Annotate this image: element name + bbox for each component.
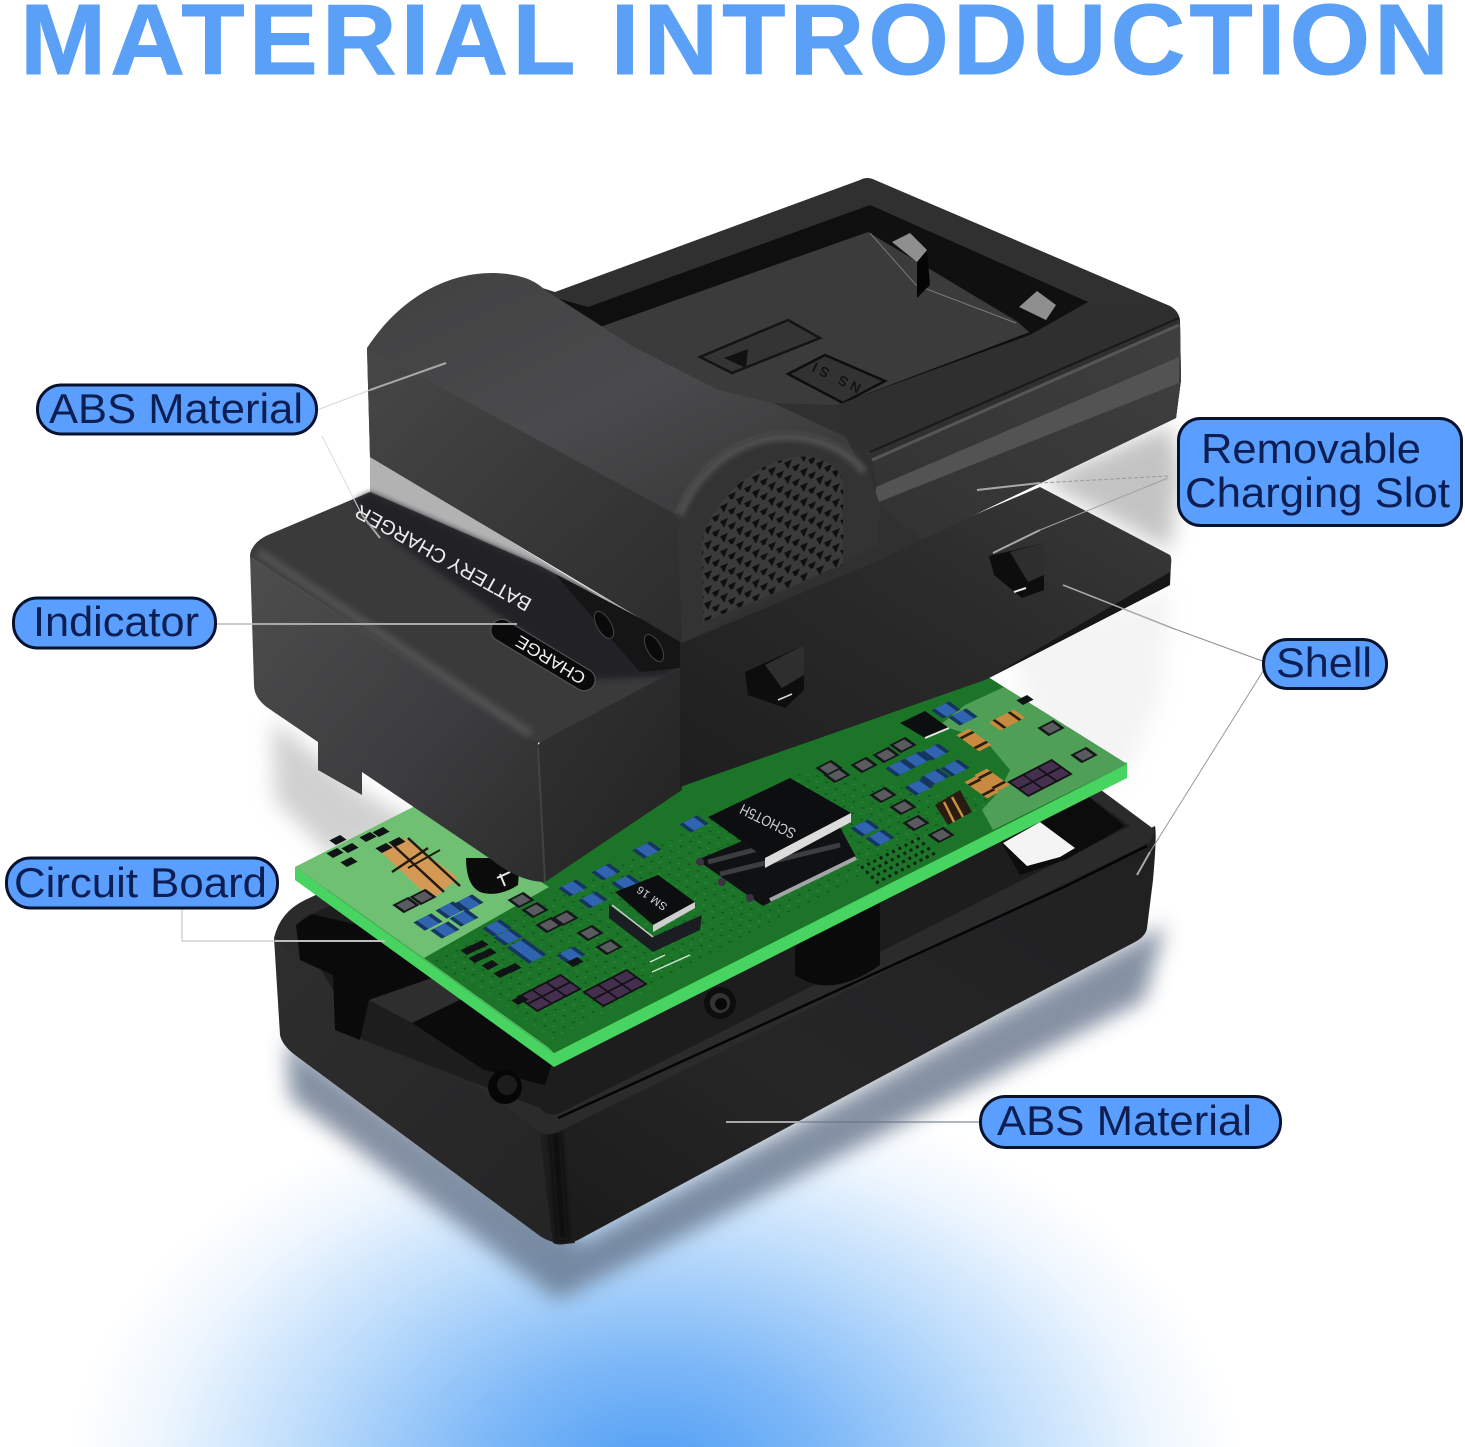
plate clip right [989,543,1044,598]
purple and dark arrays [460,695,1073,1012]
plate bottom bevel [985,572,1170,680]
block left face [250,542,545,882]
upper removable charging slot [367,178,1181,643]
orange pad group left [379,838,460,900]
charge pill [487,615,599,695]
charging slot studs [590,609,668,664]
tray floor [600,232,1030,405]
large connector [696,805,856,906]
callout: removable charging slot [1178,418,1462,526]
light left zone [295,805,549,958]
hump end face [677,433,880,643]
leader: ABS material top [317,390,370,410]
small IC chip: SM 16 [635,883,670,912]
end face bevel [680,437,864,515]
block top face [250,492,682,743]
hump left face [367,348,682,643]
callout: removable charging slot: Removable [1201,425,1421,472]
case cylinder post [795,900,880,985]
block highlight [258,552,530,734]
rim parting line [558,846,1147,1118]
case screw hole [704,987,736,1019]
charge pill: CHARGE [512,631,589,688]
tray inner right wall [870,205,1088,333]
leader: indicator [216,623,252,625]
orange parts right [935,710,1025,825]
interior channel [412,995,553,1085]
board edge [295,762,1127,1067]
circuit board [295,600,1127,1067]
lower case shell [274,630,1156,1244]
callout: ABS material bottom: ABS Material [997,1097,1252,1144]
via texture [430,770,1000,1040]
dark top strip [355,492,682,680]
charger block with plate [250,487,1171,894]
small IC chip [609,875,702,952]
light band [876,357,1179,503]
case rim [274,630,1155,1134]
tray clip two [1019,291,1056,320]
callout: indicator: Indicator [33,598,199,645]
tray clip one [892,233,927,262]
right edge highlight [872,325,1179,460]
block right face [538,668,682,882]
callout: circuit board: Circuit Board [14,859,267,906]
hump top surface [367,273,870,515]
board surface [295,600,1127,1053]
case right face [540,826,1156,1244]
cylinder under block [466,858,520,894]
model badge [788,355,885,403]
leader: removable slot [1040,476,1168,483]
knurled grip [702,457,843,622]
tray clip stem [917,250,930,298]
callout: removable charging slot: Charging Slot [1185,469,1450,516]
callout: shell: Shell [1276,639,1372,686]
case left face [274,938,575,1244]
small black pads [326,827,406,867]
case screw post [488,1070,522,1104]
callout: ABS material top: ABS Material [49,385,303,432]
interior left pocket [296,914,440,1040]
silkscreen lines [650,955,690,972]
leader: shell [1063,585,1172,628]
plate [680,487,1171,787]
case interior [296,650,1130,1115]
right side face [846,306,1181,540]
leader lines [182,363,1265,1122]
top-right square chip [900,711,949,738]
large IC chip [708,778,851,868]
light right zone [940,687,1127,830]
interior gray strip [369,975,470,1023]
button inset [700,320,820,373]
tray front rim [837,302,1180,452]
model badge: NS SI [810,360,863,397]
tray corner seams [870,233,1016,323]
soft shadows [272,425,1180,1300]
case far corner window [1000,795,1125,875]
leader: ABS material bottom [726,1121,800,1123]
upper silhouette [367,178,1181,643]
battery charger text: BATTERY CHARGER [352,500,535,615]
plate clip left [745,645,804,708]
right lower face [872,325,1181,540]
tray opening walls [528,205,1088,405]
chip label: SCHOT5H [737,800,799,842]
blue components [413,701,978,964]
gray components [392,720,1098,955]
leader: circuit board [182,908,275,941]
case corner shade [550,1130,568,1240]
left edge light band [295,867,554,1053]
dark stud recess [555,574,682,672]
via dot grid [861,838,935,883]
